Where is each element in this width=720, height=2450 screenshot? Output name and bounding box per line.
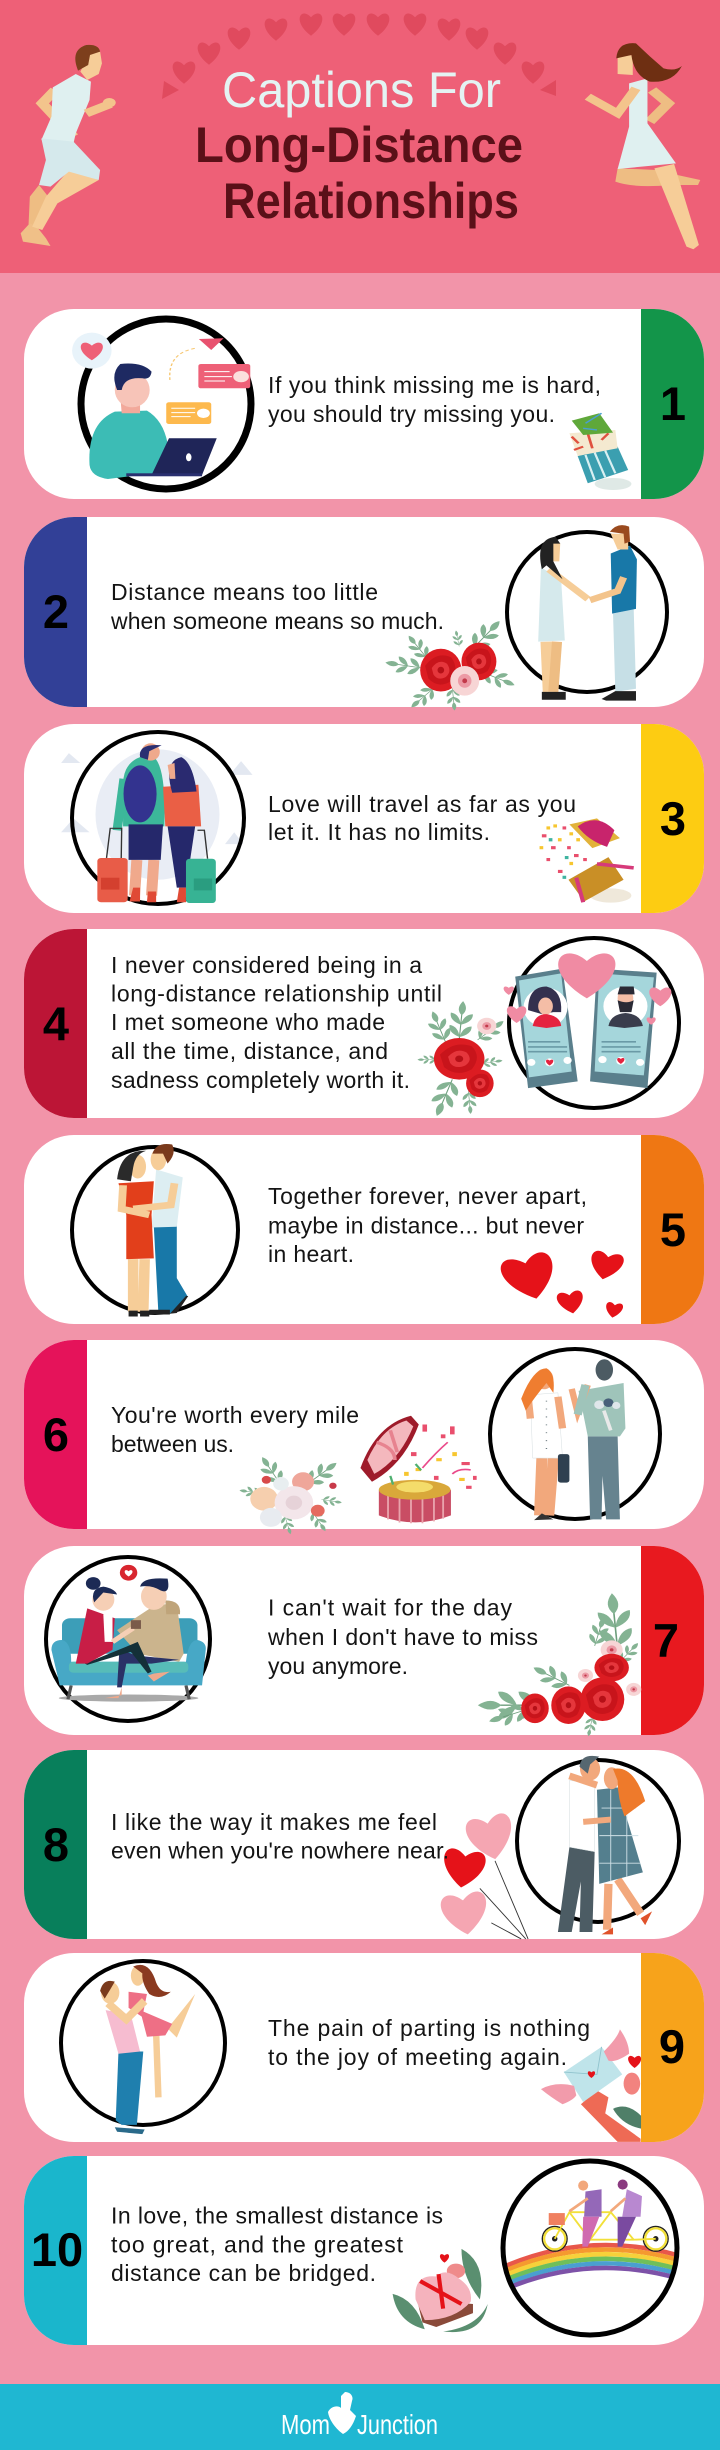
number tab 2: 2 xyxy=(43,585,69,638)
caption text xyxy=(111,1402,359,1457)
caption text xyxy=(111,952,442,1093)
illustration: man with laptop xyxy=(72,319,251,489)
running man xyxy=(21,45,116,246)
number tab 4 xyxy=(24,929,87,1118)
caption text: long-distance relationship until xyxy=(111,980,442,1006)
title: Relationships xyxy=(223,173,519,229)
caption text: Distance means too little xyxy=(111,579,378,605)
footer xyxy=(0,2384,720,2450)
icon: heart balloons xyxy=(439,1812,528,1939)
panel: caption 8 xyxy=(24,1750,704,1939)
panel: caption 2 xyxy=(24,517,704,712)
caption text: maybe in distance... but never xyxy=(268,1212,584,1238)
number tab 4: 4 xyxy=(43,997,69,1050)
caption text: all the time, distance, and xyxy=(111,1038,388,1064)
caption text xyxy=(267,1594,538,1679)
number tab 7 xyxy=(641,1546,704,1735)
icon: rose bouquet xyxy=(384,615,518,712)
card background xyxy=(24,309,704,499)
panel: caption 3 xyxy=(24,724,704,913)
illustration: tandem bicycle on rainbow xyxy=(501,2161,684,2335)
panel: caption 9 xyxy=(24,1953,704,2142)
number tab 7: 7 xyxy=(653,1614,679,1667)
caption text: I can't wait for the day xyxy=(268,1594,512,1620)
icon: heart chocolate box xyxy=(393,2249,488,2332)
caption text: when I don't have to miss xyxy=(267,1624,538,1650)
number tab 10 xyxy=(24,2156,87,2345)
number tab 2 xyxy=(24,517,87,707)
card background xyxy=(24,1135,704,1324)
number tab 9: 9 xyxy=(659,2020,685,2073)
caption text: when someone means so much. xyxy=(110,608,444,634)
caption text xyxy=(268,2015,590,2070)
caption text: sadness completely worth it. xyxy=(111,1067,410,1093)
caption text xyxy=(111,2202,443,2286)
number tab 3: 3 xyxy=(660,792,686,845)
card background xyxy=(24,724,704,913)
running woman xyxy=(588,43,700,249)
logo: MomJunction: Junction xyxy=(357,2409,438,2440)
number tab 8 xyxy=(24,1750,87,1939)
caption text xyxy=(268,791,576,845)
caption text: distance can be bridged. xyxy=(111,2260,376,2286)
illustration: couple holding hands xyxy=(507,525,667,701)
caption text: If you think missing me is hard, xyxy=(268,372,601,398)
icon: rose bouquet xyxy=(417,1000,509,1119)
caption text: you anymore. xyxy=(268,1653,408,1679)
caption text: I met someone who made xyxy=(111,1009,385,1035)
illustration: dating app phones xyxy=(504,938,679,1108)
caption text: you should try missing you. xyxy=(268,401,555,427)
logo: MomJunction xyxy=(281,2392,438,2440)
caption text xyxy=(110,579,444,634)
title: Captions For xyxy=(222,62,501,118)
caption text xyxy=(268,1183,587,1267)
caption text: In love, the smallest distance is xyxy=(111,2202,443,2228)
logo: MomJunction: Mom xyxy=(281,2409,330,2440)
card background xyxy=(24,1750,704,1939)
number tab 6 xyxy=(24,1340,87,1529)
card background xyxy=(24,1953,704,2142)
illustration: man hiding flowers xyxy=(490,1349,660,1520)
number tab 5 xyxy=(641,1135,704,1324)
panel: caption 4 xyxy=(24,929,704,1119)
card background xyxy=(24,929,704,1118)
caption text: to the joy of meeting again. xyxy=(268,2044,567,2070)
header banner xyxy=(0,0,720,273)
panel: caption 10 xyxy=(24,2156,704,2345)
title xyxy=(195,62,523,229)
caption text: Together forever, never apart, xyxy=(268,1183,587,1209)
number tab 10: 10 xyxy=(31,2223,83,2276)
icon: white flower bouquet xyxy=(239,1453,343,1535)
caption text: Love will travel as far as you xyxy=(268,791,576,817)
illustration: couple with suitcases xyxy=(61,732,253,904)
number tab 5: 5 xyxy=(660,1203,686,1256)
icon: heart gift box xyxy=(360,1416,477,1523)
caption text: between us. xyxy=(111,1431,234,1457)
card background xyxy=(24,1340,704,1529)
icon: rose garland xyxy=(478,1592,643,1737)
panel: caption 1 xyxy=(24,309,704,499)
number tab 3 xyxy=(641,724,704,913)
number tab 9 xyxy=(641,1953,704,2142)
number tab 1 xyxy=(641,309,704,499)
caption text: I like the way it makes me feel xyxy=(111,1809,437,1835)
icon: winged love letter xyxy=(541,2029,641,2142)
caption text: let it. It has no limits. xyxy=(268,819,490,845)
illustration: embracing couple xyxy=(72,1144,238,1317)
caption text: in heart. xyxy=(268,1241,354,1267)
card background xyxy=(24,1546,704,1735)
caption text: even when you're nowhere near. xyxy=(111,1838,449,1864)
illustration: dancing couple xyxy=(517,1756,679,1934)
icon: open gold gift xyxy=(540,818,634,903)
card background xyxy=(24,2156,704,2345)
caption text xyxy=(268,372,601,427)
caption text: You're worth every mile xyxy=(111,1402,359,1428)
caption text: The pain of parting is nothing xyxy=(268,2015,590,2041)
illustration: man lifting woman xyxy=(61,1961,225,2134)
panel: caption 7 xyxy=(24,1546,704,1737)
number tab 8: 8 xyxy=(43,1818,69,1871)
card background xyxy=(24,517,704,707)
icon: red hearts xyxy=(498,1250,625,1319)
panel: caption 5 xyxy=(24,1135,704,1324)
icon: gift box xyxy=(569,413,631,490)
panel: caption 6 xyxy=(24,1340,704,1535)
number tab 1: 1 xyxy=(660,377,686,430)
caption text: I never considered being in a xyxy=(111,952,422,978)
number tab 6: 6 xyxy=(43,1408,69,1461)
title: Long-Distance xyxy=(195,117,523,173)
caption text xyxy=(111,1809,449,1864)
illustration: couple on sofa xyxy=(46,1557,210,1721)
hearts arc xyxy=(162,14,556,99)
caption text: too great, and the greatest xyxy=(111,2232,404,2258)
